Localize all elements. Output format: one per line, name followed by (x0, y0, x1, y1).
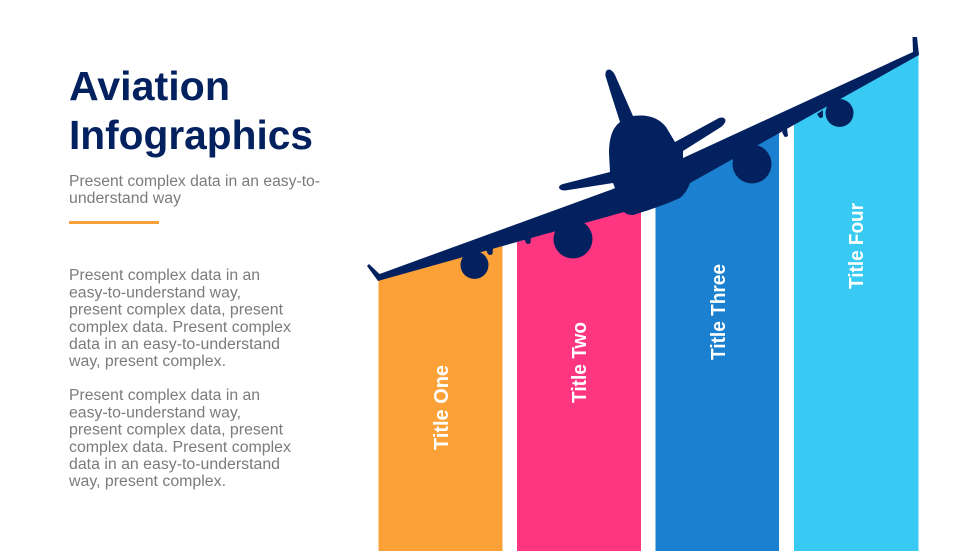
text block: second paragraph: complex data. Present complex (69, 439, 291, 456)
title: Aviation (69, 63, 230, 109)
subtitle: Present complex data in an easy-to- (69, 173, 320, 190)
text block: second paragraph: data in an easy-to-understand (69, 456, 280, 473)
text block: second paragraph: easy-to-understand way, (69, 404, 241, 421)
title (69, 63, 313, 158)
flap fairings (486, 110, 823, 255)
text block: first paragraph: Present complex data in an (69, 267, 260, 284)
text block: second paragraph: Present complex data in an (69, 387, 260, 404)
airplane wings and fuselage (367, 37, 919, 281)
text block: first paragraph: way, present complex. (68, 353, 226, 370)
subtitle (69, 173, 320, 207)
right outer engine (826, 99, 854, 127)
bar: title four (794, 52, 918, 551)
text block: second paragraph: present complex data, present (69, 422, 284, 439)
bar: title three (656, 130, 779, 551)
text block: first paragraph: data in an easy-to-understand (69, 336, 280, 353)
text block: first paragraph: complex data. Present complex (69, 319, 291, 336)
accent divider (69, 221, 159, 224)
left inner engine (554, 220, 592, 258)
icon: airplane silhouette (367, 37, 919, 281)
text block: first paragraph (68, 267, 291, 370)
subtitle: understand way (69, 190, 181, 207)
left outer engine (460, 251, 488, 279)
right inner engine (732, 144, 772, 184)
bar: title two (517, 205, 641, 551)
title: Infographics (69, 112, 313, 158)
bar: title one (378, 246, 502, 551)
bar: title one: Title One (430, 365, 453, 450)
text block: first paragraph: easy-to-understand way, (69, 284, 241, 301)
bar: title two: Title Two (568, 322, 591, 403)
bar: title three: Title Three (707, 264, 730, 360)
text block: second paragraph (68, 387, 291, 490)
bar: title four: Title Four (845, 203, 868, 289)
text block: second paragraph: way, present complex. (68, 473, 226, 490)
text block: first paragraph: present complex data, present (69, 302, 284, 319)
